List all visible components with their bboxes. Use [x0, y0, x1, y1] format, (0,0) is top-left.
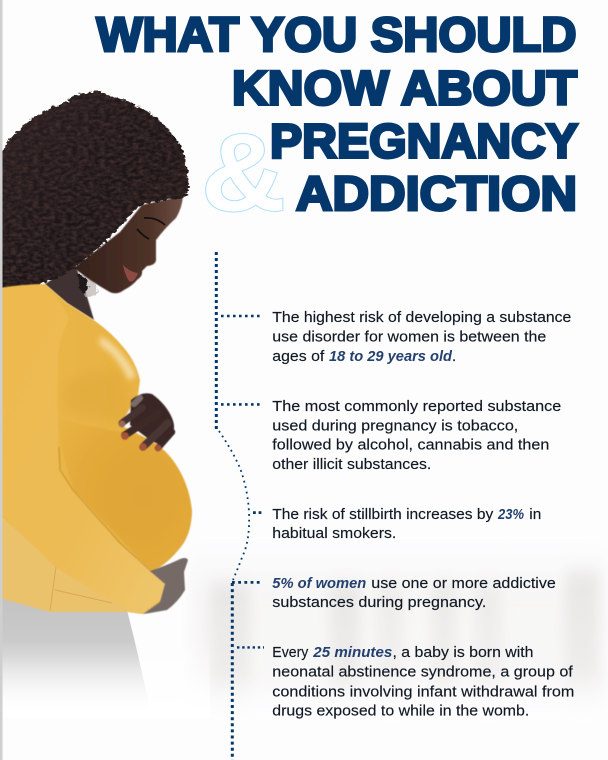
fact: neonatal abstinence syndrome: neonatal abstinence syndrome, a group of	[272, 664, 574, 680]
belly	[58, 420, 192, 572]
fact: stillbirth risk: habitual smokers.	[272, 525, 396, 542]
upper hand	[119, 393, 174, 451]
chest highlight	[100, 336, 136, 380]
sweater body	[0, 284, 192, 614]
fact: stillbirth risk	[272, 506, 541, 542]
pants	[0, 595, 151, 716]
fact: neonatal abstinence syndrome: conditions involving infant withdrawal from	[272, 683, 574, 700]
fade at bottom of photo	[0, 640, 210, 718]
fact: 5% of women	[272, 575, 556, 611]
fact: stillbirth risk: The risk of stillbirth increases by	[272, 506, 494, 523]
face	[74, 196, 183, 293]
hair	[0, 92, 189, 294]
hem seams	[50, 567, 112, 611]
title: PREGNANCY	[270, 114, 578, 168]
fact: stillbirth risk: 23%	[497, 506, 524, 523]
fact: stillbirth risk: in	[529, 506, 541, 523]
left page edge	[0, 0, 2, 760]
dotted connector timeline	[216, 252, 264, 760]
fact: 5% of women: 5% of women	[272, 575, 366, 592]
fact: age risk: ages of	[272, 348, 325, 365]
title	[96, 8, 578, 235]
fact: commonly reported substances: used during pregnancy is tobacco,	[272, 417, 518, 434]
fact: age risk: The highest risk of developing a substance	[272, 309, 571, 326]
title: WHAT YOU SHOULD	[96, 8, 576, 62]
fact: commonly reported substances: followed by alcohol, cannabis and then	[272, 436, 549, 454]
fact: 5% of women: substances during pregnancy.	[272, 594, 486, 611]
fact: age risk: use disorder for women is between the	[272, 328, 546, 346]
lower sweater hem	[0, 515, 133, 612]
neck	[45, 265, 94, 320]
fact: neonatal abstinence syndrome: Every	[272, 644, 309, 661]
fact: neonatal abstinence syndrome: , a baby is born with	[392, 644, 534, 661]
arm shadow	[59, 447, 152, 572]
fact: 5% of women: use one or more addictive	[371, 575, 556, 592]
fact: neonatal abstinence syndrome	[272, 644, 574, 720]
fact: age risk: 18 to 29 years old	[329, 348, 453, 365]
torso	[0, 284, 192, 614]
photo: pregnant woman in yellow top	[0, 92, 192, 716]
fact: neonatal abstinence syndrome: drugs exposed to while in the womb.	[272, 702, 529, 720]
title: ADDICTION	[296, 167, 577, 221]
fact: commonly reported substances	[272, 398, 561, 473]
chest shading	[62, 370, 132, 422]
eye and brow	[137, 218, 165, 239]
earring	[77, 274, 97, 297]
fact: commonly reported substances: The most commonly reported substance	[272, 398, 561, 415]
fact: age risk	[272, 309, 571, 365]
sleeve arm	[0, 285, 165, 613]
title: KNOW ABOUT	[232, 62, 577, 116]
lower hand	[143, 558, 188, 614]
background: blurred curtains	[190, 540, 608, 718]
ampersand outline: &	[201, 112, 286, 234]
fact: neonatal abstinence syndrome: 25 minutes	[312, 644, 392, 661]
lips	[123, 265, 138, 282]
fact: age risk: .	[452, 348, 456, 365]
fact: commonly reported substances: other illicit substances.	[272, 456, 431, 473]
